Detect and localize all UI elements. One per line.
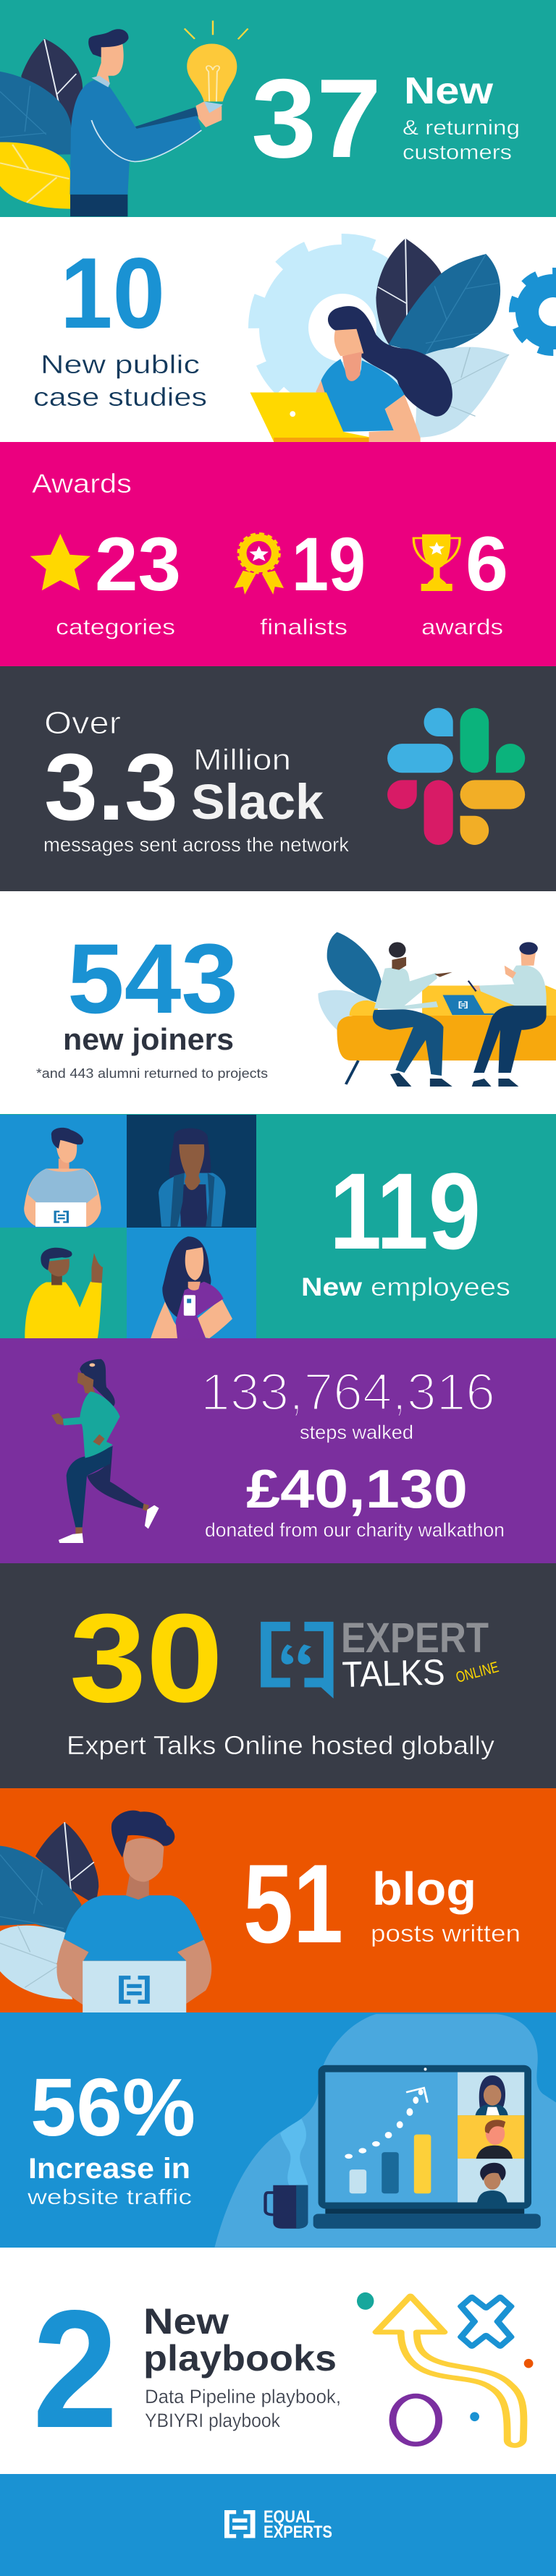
panel: awards xyxy=(0,442,556,666)
grid cell: woman in jacket xyxy=(127,1115,256,1228)
label: new playbooks: New xyxy=(143,2301,229,2342)
label: new playbooks xyxy=(143,2301,337,2379)
label: increase in: Increase in xyxy=(28,2153,190,2185)
logo text: ONLINE: ONLINE xyxy=(454,1659,500,1686)
illustration: man holding light bulb with leaves xyxy=(0,20,248,216)
heading: Awards: Awards xyxy=(32,469,132,498)
label: Over: Over xyxy=(44,705,121,741)
labels: categories, finalists, awards xyxy=(56,614,503,639)
stat: steps walked: 133,764,316 xyxy=(201,1364,495,1421)
grid cell: man with laptop xyxy=(0,1115,127,1228)
stat: 56%: 56% xyxy=(30,2062,195,2153)
logo text: EXPERT: EXPERT xyxy=(341,1615,489,1662)
stat: 23: 23 xyxy=(95,522,181,607)
icon: large light gear xyxy=(256,241,429,415)
logo text: TALKS: TALKS xyxy=(342,1652,445,1695)
stat: 19: 19 xyxy=(292,522,366,607)
label: New: New xyxy=(404,70,494,112)
label: donated from our charity walkathon: donated from our charity walkathon xyxy=(205,1519,505,1541)
logo: expert talks speech bracket xyxy=(261,1622,334,1699)
panel: expert talks xyxy=(0,1563,556,1788)
panel: new employees xyxy=(0,1114,556,1338)
stat: 10: 10 xyxy=(60,237,165,349)
label: new public case studies: New public xyxy=(41,349,200,379)
icon: steaming mug xyxy=(266,2119,308,2229)
label: new public case studies xyxy=(33,349,207,412)
label: posts written: posts written xyxy=(371,1920,521,1947)
label: New employees xyxy=(301,1273,510,1301)
label: blog: blog xyxy=(372,1863,476,1915)
illustration: two people on a yellow sofa with laptop xyxy=(318,932,556,1087)
label: playbook names xyxy=(145,2386,341,2431)
label: New employees: New xyxy=(301,1273,363,1301)
panel: new joiners xyxy=(0,891,556,1114)
label: new joiners: new joiners xyxy=(63,1022,234,1056)
label: and returning customers xyxy=(403,116,520,164)
icon: rosette xyxy=(234,534,284,595)
stat: 3.3: 3.3 xyxy=(44,734,178,840)
background blob xyxy=(214,2014,556,2247)
icon: strategy arrow, cross, circle and dots xyxy=(357,2292,533,2446)
label: playbook names: Data Pipeline playbook, xyxy=(145,2386,341,2407)
icon: star xyxy=(30,534,90,590)
label: new playbooks: playbooks xyxy=(143,2338,337,2379)
logo: equal experts mark xyxy=(224,2510,255,2538)
illustration: laptop with video call and growth chart xyxy=(313,2065,541,2229)
label: new public case studies: case studies xyxy=(33,382,207,412)
stat: 37: 37 xyxy=(251,56,382,181)
panel: blog posts xyxy=(0,1788,556,2012)
labels: categories, finalists, awards: awards xyxy=(421,614,503,639)
panel: slack messages xyxy=(0,666,556,891)
label: website traffic: website traffic xyxy=(27,2185,192,2209)
panel: customers xyxy=(0,0,556,217)
panel: charity walkathon xyxy=(0,1338,556,1563)
illustration: runner xyxy=(51,1359,159,1543)
label: and returning customers: customers xyxy=(403,141,512,164)
label: and returning customers: & returning xyxy=(403,116,520,140)
logo text: equal experts: EXPERTS xyxy=(264,2522,332,2542)
labels: categories, finalists, awards: finalists xyxy=(260,614,348,639)
logo text: equal experts: EQUAL xyxy=(264,2507,315,2527)
logo text: equal experts xyxy=(264,2507,332,2542)
stat: 51: 51 xyxy=(243,1841,343,1966)
footnote: alumni returned: *and 443 alumni returned to projects xyxy=(36,1066,268,1081)
illustration: man with laptop and leaves xyxy=(0,1811,211,2012)
panel: website traffic xyxy=(0,2012,556,2248)
icon: small blue gear xyxy=(513,272,556,352)
icon: slack logo xyxy=(387,708,525,845)
panel: footer xyxy=(0,2474,556,2576)
stat: 6: 6 xyxy=(466,520,508,607)
stat: 543: 543 xyxy=(67,924,238,1034)
label: playbook names: YBIYRI playbook xyxy=(145,2410,280,2431)
icon: trophy xyxy=(413,535,460,591)
stat: amount donated: £40,130 xyxy=(246,1458,468,1519)
label: Million: Million xyxy=(193,743,291,776)
label: messages sent across the network: messages sent across the network xyxy=(43,833,350,856)
stat: 119: 119 xyxy=(329,1150,481,1272)
panel: playbooks xyxy=(0,2248,556,2474)
label: steps walked: steps walked xyxy=(300,1421,413,1443)
stat: 30: 30 xyxy=(70,1587,223,1728)
panel: case studies xyxy=(0,217,556,442)
stat: 2: 2 xyxy=(33,2276,118,2463)
label: expert talks online hosted globally: Expert Talks Online hosted globally xyxy=(67,1730,494,1760)
grid cell: woman with phone xyxy=(127,1228,256,1338)
label: New employees: employees xyxy=(371,1273,510,1301)
illustration: woman at yellow laptop with leaves xyxy=(250,238,509,442)
labels: categories, finalists, awards: categories xyxy=(56,614,175,639)
grid cell: man in yellow pointing up xyxy=(0,1228,127,1338)
label: Slack: Slack xyxy=(191,774,324,830)
